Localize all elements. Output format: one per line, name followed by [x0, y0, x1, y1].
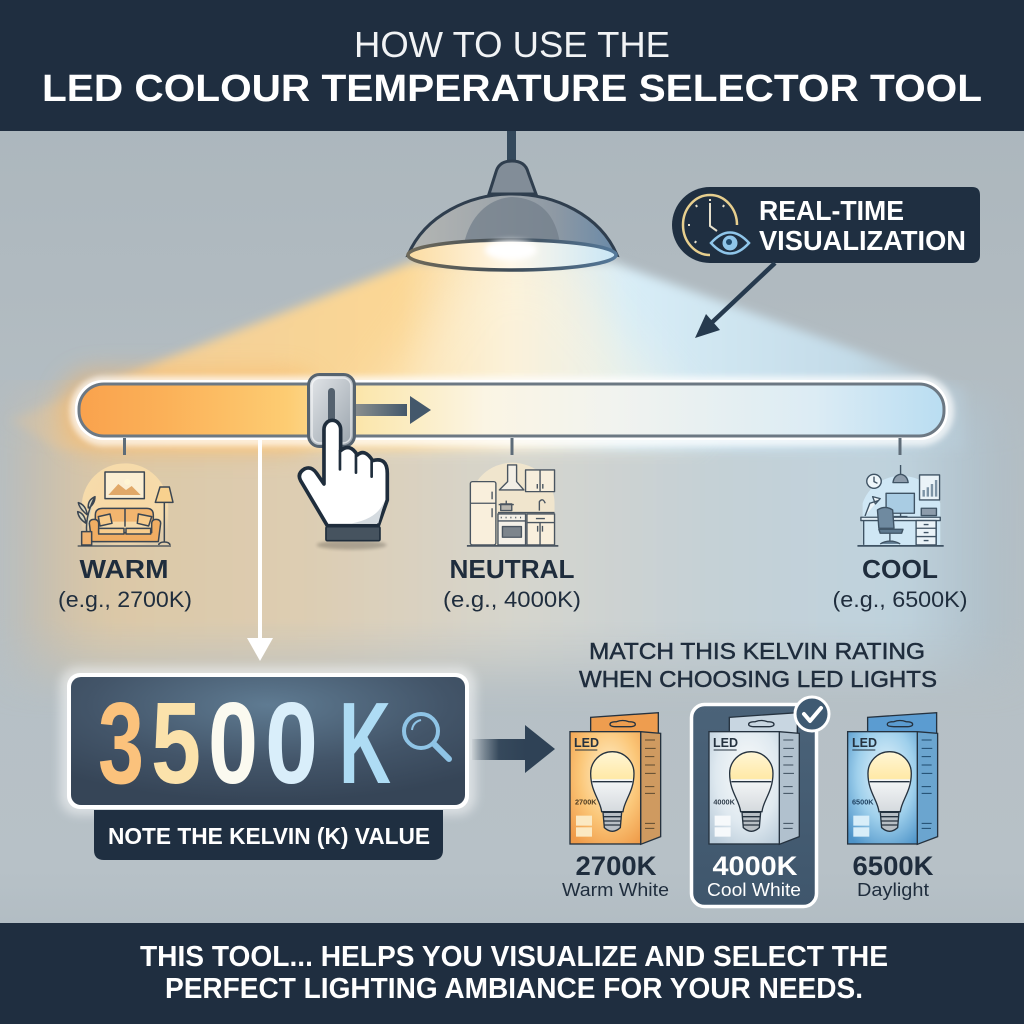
callout text: REAL-TIME [759, 195, 904, 226]
arrow: callout to slider [695, 263, 775, 338]
package [570, 713, 661, 844]
kelvin readout display [60, 667, 476, 815]
warm zone [58, 463, 192, 612]
readout value: 0 [208, 678, 258, 808]
name: Cool White [707, 880, 801, 900]
icon: living room [78, 463, 173, 546]
neutral label: NEUTRAL [450, 554, 575, 584]
cool kelvin example: (e.g., 6500K) [832, 587, 968, 612]
cool zone [832, 465, 968, 612]
heading: match kelvin rating: WHEN CHOOSING LED LIGHTS [579, 666, 937, 692]
package [709, 713, 799, 844]
readout value [98, 678, 391, 808]
heading: match kelvin rating: MATCH THIS KELVIN RATING [589, 638, 925, 664]
package: 6500K [852, 797, 874, 806]
warm label: WARM [80, 554, 168, 584]
product: 4000K cool white [707, 713, 801, 900]
package: 2700K [575, 797, 597, 806]
title line two: LED COLOUR TEMPERATURE SELECTOR TOOL [42, 68, 982, 110]
readout value: 3 [98, 678, 144, 808]
kelvin: 4000K [712, 851, 798, 881]
name: Warm White [562, 880, 669, 900]
kelvin: 2700K [576, 851, 657, 881]
light beam from the lamp [10, 262, 965, 450]
slider knob [308, 374, 354, 446]
pendant lamp [408, 131, 617, 270]
title line one: HOW TO USE THE [354, 24, 670, 65]
icon: selected check mark [795, 697, 829, 731]
selected product highlight card [692, 704, 816, 906]
readout value: K [339, 678, 391, 808]
package [848, 713, 938, 844]
title banner [0, 0, 1024, 131]
neutral zone [443, 463, 581, 612]
icon: kitchen [467, 463, 558, 546]
callout: real-time visualization [672, 187, 980, 263]
cool label: COOL [862, 554, 938, 584]
centre light core [350, 262, 700, 430]
name: Daylight [857, 880, 929, 900]
colour temperature slider [70, 376, 954, 446]
readout value: 5 [151, 678, 201, 808]
product: 2700K warm white [562, 713, 669, 900]
icon: clock [683, 195, 737, 255]
arrow: slide direction [355, 396, 431, 424]
arrow: readout to products [472, 725, 555, 773]
package: 4000K [713, 797, 736, 806]
callout: real-time visualization: VISUALIZATION [759, 225, 966, 256]
arrow: selected value down to readout [247, 440, 273, 661]
icon: office desk [857, 465, 944, 546]
icon: eye [711, 232, 749, 254]
warm kelvin example: (e.g., 2700K) [58, 587, 192, 612]
light glow below the slider [20, 400, 1005, 690]
readout value: 0 [265, 678, 318, 808]
package brand text: LED [713, 736, 738, 750]
heading: match kelvin rating [579, 638, 937, 692]
footer banner [0, 923, 1024, 1024]
note label [94, 810, 443, 860]
tick marks [124, 438, 900, 455]
neutral kelvin example: (e.g., 4000K) [443, 587, 581, 612]
note label: NOTE THE KELVIN (K) VALUE [108, 823, 430, 849]
package brand text: LED [852, 736, 877, 750]
icon: pointing hand [299, 420, 387, 550]
package brand text: LED [574, 736, 599, 750]
slider warm glow [60, 370, 320, 452]
footer text line two: PERFECT LIGHTING AMBIANCE FOR YOUR NEEDS. [165, 973, 863, 1005]
product: 6500K daylight [848, 713, 938, 900]
kelvin: 6500K [852, 851, 934, 881]
footer text line one: THIS TOOL... HELPS YOU VISUALIZE AND SELECT THE [140, 941, 888, 973]
icon: magnifying glass [404, 714, 449, 759]
